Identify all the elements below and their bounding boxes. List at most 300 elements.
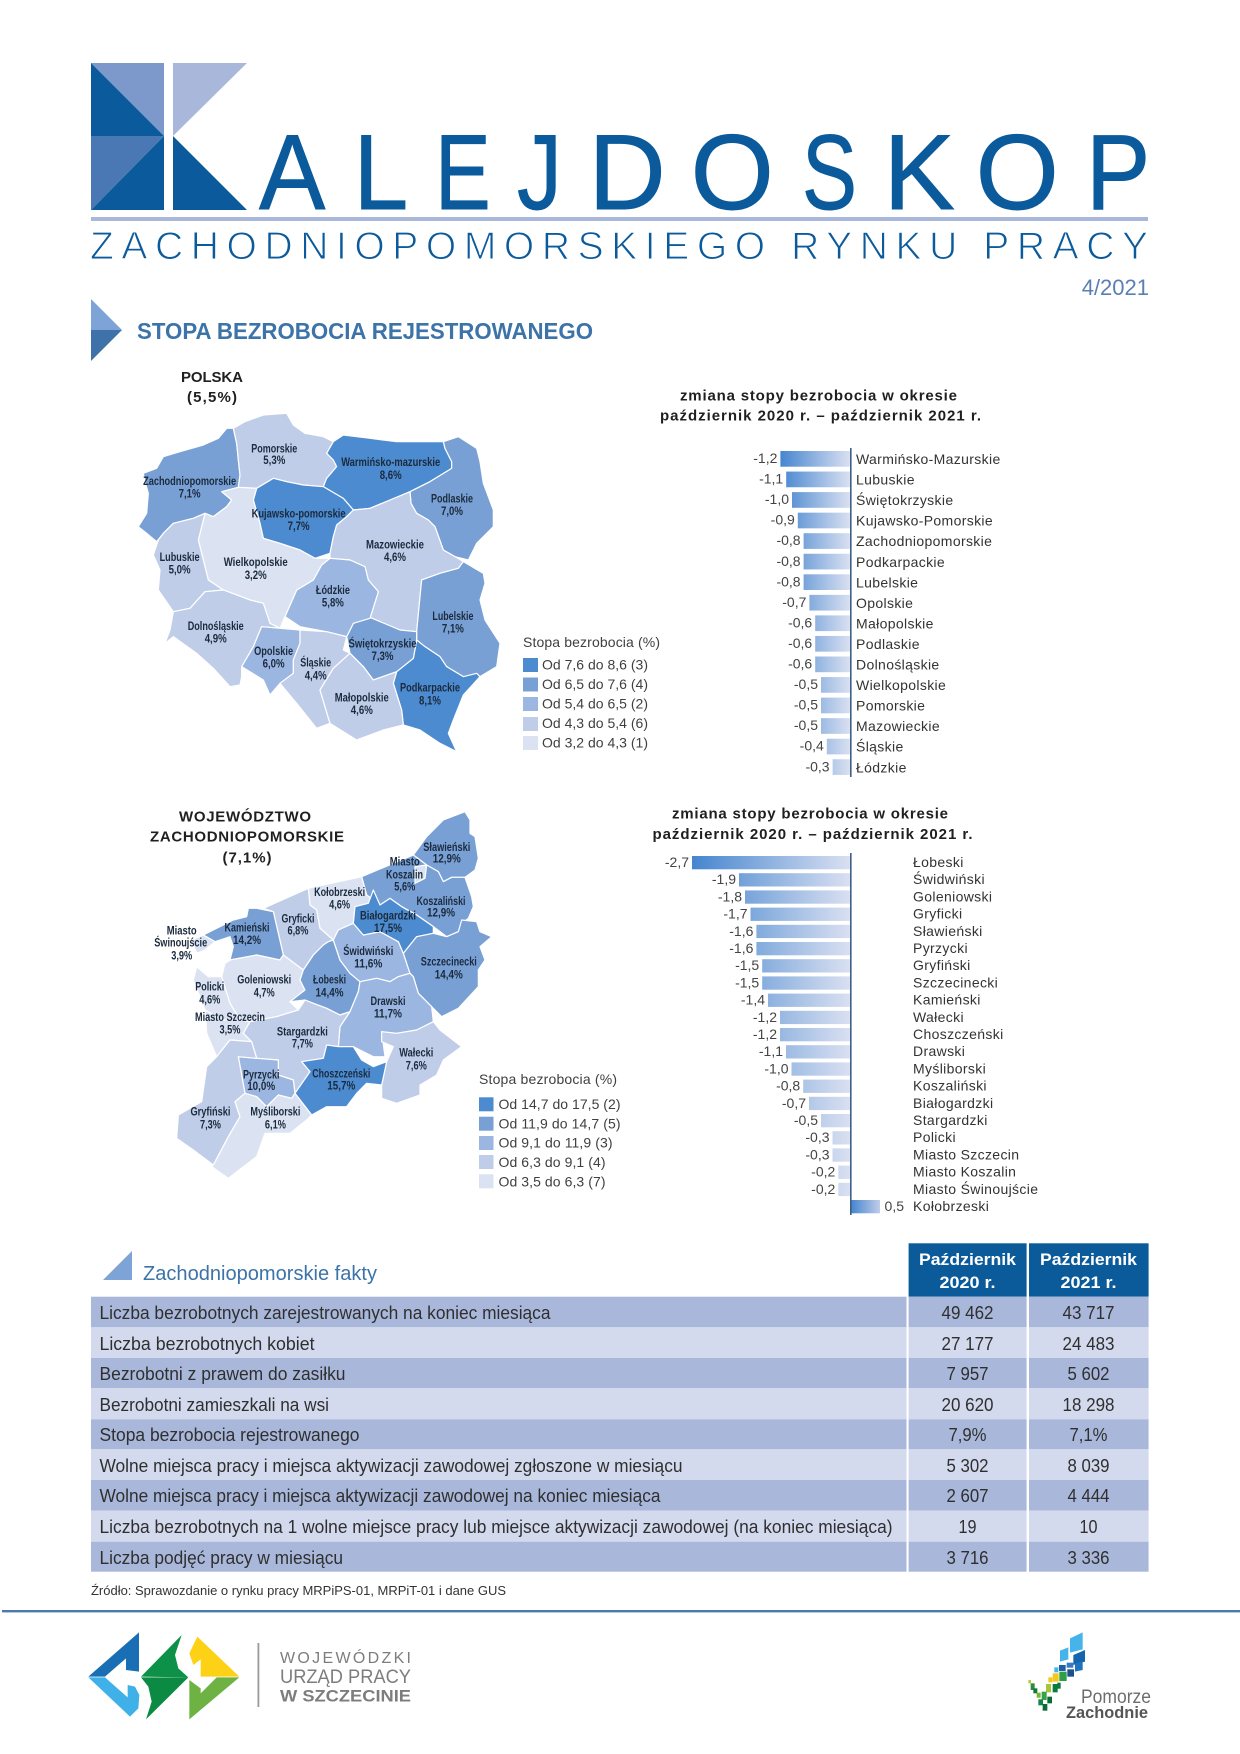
masthead [90, 63, 1150, 300]
legend: counties [479, 1071, 620, 1189]
values: -0,5 [794, 1112, 818, 1128]
chart title: zmiana stopy bezrobocia w okresie [680, 388, 957, 405]
row labels: Liczba bezrobotnych kobiet [100, 1334, 314, 1354]
values: -0,2 [811, 1181, 836, 1197]
bars [780, 451, 850, 775]
table rows backgrounds [91, 1297, 1149, 1572]
column values October 2020: 19 [958, 1517, 976, 1537]
values: -1,5 [735, 957, 759, 973]
region labels: Poland: 5,0% [169, 562, 191, 576]
county: Miasto Szczecin [205, 1010, 252, 1057]
region labels: Poland: 7,1% [442, 622, 464, 636]
column headers: Październik [1040, 1250, 1138, 1269]
county: Miasto Świnoujście [192, 935, 215, 953]
county labels: 7,6% [406, 1058, 427, 1072]
column values October 2021: 43 717 [1062, 1303, 1114, 1323]
county names: Kamieński [913, 992, 981, 1008]
county labels: Miasto [167, 923, 197, 937]
legend: Poland: Od 3,2 do 4,3 (1) [542, 734, 648, 750]
logo text [1066, 1687, 1151, 1722]
county labels: Łobeski [313, 973, 346, 987]
voivodeship names: Małopolskie [856, 615, 934, 631]
region labels: Poland: 8,6% [380, 468, 402, 482]
voivodeship names: Kujawsko-Pomorskie [856, 513, 993, 529]
region: Opolskie [242, 627, 300, 695]
column values October 2020: 3 716 [946, 1548, 988, 1568]
county labels: 6,8% [288, 923, 309, 937]
section heading [91, 299, 593, 361]
column values October 2021 [1062, 1303, 1114, 1568]
county names [913, 854, 1038, 1214]
legend: counties: Od 14,7 do 17,5 (2) [498, 1096, 620, 1112]
voivodeship names: Lubelskie [856, 574, 918, 590]
values: -1,2 [753, 1009, 777, 1025]
region labels: Poland: 7,3% [372, 649, 394, 663]
column values October 2021: 18 298 [1062, 1395, 1114, 1415]
voivodeship names: Podlaskie [856, 636, 920, 652]
values: -2,7 [665, 854, 689, 870]
county labels: 14,4% [435, 967, 463, 981]
county: Policki [193, 967, 240, 1020]
values: -1,1 [759, 471, 783, 487]
row labels: Stopa bezrobocia rejestrowanego [100, 1425, 360, 1445]
row labels: Liczba bezrobotnych zarejestrowanych na koniec miesiąca [100, 1303, 551, 1323]
county labels: 12,9% [427, 906, 455, 920]
issue number: 4/2021 [1082, 275, 1149, 300]
region labels: Poland: Zachodniopomorskie [143, 474, 236, 488]
header rule [91, 217, 1148, 221]
icon: pixel squares [1028, 1632, 1085, 1711]
county: Świdwiński [333, 923, 410, 982]
column values October 2020: 27 177 [942, 1334, 994, 1354]
column values October 2021: 8 039 [1068, 1456, 1110, 1476]
legend: counties: Od 11,9 do 14,7 (5) [498, 1115, 620, 1131]
title: O [691, 112, 774, 232]
organisation name: WOJEWÓDZKI [280, 1648, 411, 1667]
county labels: 3,5% [220, 1022, 241, 1036]
values: -0,3 [805, 1129, 830, 1145]
region labels: Poland: Śląskie [300, 655, 331, 670]
county: Wałecki [382, 1022, 462, 1103]
county: Miasto Koszalin [415, 865, 427, 883]
source note: Źródło: Sprawozdanie o rynku pracy MRPiPS-01, MRPiT-01 i dane GUS [91, 1583, 506, 1598]
region: Lubelskie [417, 562, 500, 677]
panel: Polska map [138, 369, 660, 752]
county names: Pyrzycki [913, 940, 968, 956]
heading text: STOPA BEZROBOCIA REJESTROWANEGO [137, 318, 593, 344]
voivodeship names [856, 451, 1001, 775]
county labels: 4,7% [254, 986, 275, 1000]
values [665, 854, 904, 1214]
county labels: 17,5% [374, 921, 402, 935]
chart title: październik 2020 r. – październik 2021 r. [652, 826, 972, 843]
legend: counties: Od 3,5 do 6,3 (7) [498, 1173, 606, 1189]
county labels: 4,6% [329, 897, 350, 911]
title: E [435, 113, 491, 232]
region labels: Poland: 4,6% [384, 550, 406, 564]
values: -1,6 [729, 923, 754, 939]
county labels: Świdwiński [343, 943, 393, 958]
county labels: 10,0% [247, 1079, 275, 1093]
legend: Poland: Od 7,6 do 8,6 (3) [542, 656, 648, 672]
region labels: Poland: Kujawsko-pomorskie [252, 506, 346, 520]
values: -0,8 [776, 532, 801, 548]
county labels: Kołobrzeski [314, 885, 365, 899]
region labels: Poland: 6,0% [263, 657, 285, 671]
voivodeship names: Świętokrzyskie [856, 491, 953, 508]
county: Choszczeński [295, 1045, 387, 1115]
title: L [354, 112, 408, 232]
map heading: Polska [181, 369, 243, 406]
column headers [909, 1243, 1149, 1297]
region labels: Poland: Warmińsko-mazurskie [341, 455, 440, 469]
column values October 2021: 4 444 [1068, 1486, 1110, 1506]
values: -0,6 [788, 635, 812, 651]
county labels: 12,9% [433, 852, 461, 866]
row labels: Bezrobotni zamieszkali na wsi [100, 1395, 329, 1415]
region labels: Poland: Lubelskie [432, 609, 474, 623]
organisation name: URZĄD PRACY [280, 1667, 411, 1688]
county names: Łobeski [913, 854, 964, 870]
county labels: 11,7% [374, 1007, 402, 1021]
region labels: Poland: 4,6% [351, 703, 373, 717]
region labels: Poland: Łódzkie [316, 583, 350, 597]
county: Myśliborski [212, 1093, 312, 1178]
values: -0,3 [805, 1146, 830, 1162]
county: Szczecinecki [403, 920, 492, 1017]
region labels: Poland: Świętokrzyskie [348, 635, 417, 650]
county names: Policki [913, 1129, 956, 1145]
county names: Sławieński [913, 923, 983, 939]
county names: Gryficki [913, 906, 962, 922]
column headers: 2020 r. [940, 1273, 996, 1292]
organisation name: W SZCZECINIE [280, 1687, 411, 1706]
region labels: Poland: Pomorskie [251, 441, 298, 455]
county labels: Gryfiński [190, 1105, 230, 1119]
county labels: Białogardzki [360, 908, 416, 922]
values: -0,8 [776, 1078, 800, 1094]
map heading: województwo: WOJEWÓDZTWO [179, 808, 311, 826]
county names: Drawski [913, 1043, 965, 1059]
county names: Białogardzki [913, 1095, 993, 1111]
row labels: Bezrobotni z prawem do zasiłku [100, 1364, 346, 1384]
voivodeship names: Śląskie [856, 738, 904, 755]
values: -0,4 [800, 738, 824, 754]
column values October 2020 [942, 1303, 994, 1568]
region: Kujawsko-pomorskie [253, 478, 353, 558]
values: -0,7 [782, 1095, 806, 1111]
table heading: Zachodniopomorskie fakty [143, 1263, 377, 1285]
county labels: Koszaliński [416, 894, 466, 908]
county labels: Goleniowski [237, 973, 291, 987]
region: Śląskie [280, 630, 350, 728]
county names: Miasto Koszalin [913, 1164, 1016, 1180]
region: Podkarpackie [393, 640, 480, 752]
county labels [154, 840, 477, 1131]
title: O [976, 112, 1059, 232]
values: -1,2 [753, 450, 778, 466]
voivodeship names: Podkarpackie [856, 554, 945, 570]
map heading: województwo: (7,1%) [222, 849, 272, 866]
region labels: Poland: Opolskie [254, 644, 293, 658]
county labels: 5,6% [394, 880, 416, 894]
region: Dolnośląskie [165, 590, 280, 687]
county names: Wałecki [913, 1009, 964, 1025]
divider [258, 1643, 259, 1707]
voivodeship names: Dolnośląskie [856, 656, 940, 672]
logo text: Zachodnie [1066, 1703, 1148, 1722]
values: -0,5 [794, 697, 818, 713]
region: Małopolskie [320, 653, 403, 740]
chart title [652, 805, 972, 843]
values: -1,4 [741, 992, 765, 1008]
values: -0,5 [794, 676, 818, 692]
legend: Poland: Stopa bezrobocia (%) [523, 634, 660, 650]
column values October 2020: 2 607 [946, 1486, 988, 1506]
region: Warmińsko-mazurskie [323, 435, 452, 510]
county labels: 11,6% [354, 956, 383, 970]
region labels: Poland: 5,3% [263, 453, 286, 467]
county: Sławieński [413, 812, 478, 882]
title: P [1086, 112, 1150, 232]
panel: bar chart counties [652, 805, 1038, 1215]
title: D [588, 112, 666, 232]
row labels: Wolne miejsca pracy i miejsca aktywizacji zawodowej zgłoszone w miesiącu [100, 1456, 682, 1476]
county labels: Miasto Szczecin [195, 1010, 265, 1024]
column headers: Październik [919, 1250, 1017, 1269]
column values October 2021: 5 602 [1068, 1364, 1110, 1384]
region: Mazowieckie [330, 492, 463, 632]
county: Goleniowski [222, 955, 305, 1022]
values: -0,8 [776, 573, 801, 589]
values: -1,5 [735, 974, 759, 990]
row labels: Liczba podjęć pracy w miesiącu [100, 1548, 343, 1568]
county labels: Policki [195, 980, 224, 994]
county labels: Sławieński [423, 840, 470, 854]
legend: Poland: Od 4,3 do 5,4 (6) [542, 715, 648, 731]
region: Łódzkie [285, 558, 378, 637]
county labels: Choszczeński [312, 1066, 370, 1080]
region: Podlaskie [410, 437, 493, 560]
row labels [100, 1303, 892, 1568]
county names: Świdwiński [913, 870, 985, 887]
values: 0,5 [885, 1198, 904, 1214]
county: Pyrzycki [238, 1057, 295, 1107]
region labels: Poland: Wielkopolskie [224, 555, 288, 569]
voivodeship names: Warmińsko-Mazurskie [856, 451, 1001, 467]
county labels: Kamieński [224, 921, 270, 935]
county names: Goleniowski [913, 888, 992, 904]
region labels: Poland: 8,1% [419, 693, 441, 707]
region labels: Poland: 3,2% [245, 568, 267, 582]
county names: Myśliborski [913, 1060, 986, 1076]
county labels: Stargardzki [277, 1025, 328, 1039]
county: Białogardzki [353, 890, 433, 953]
region labels: Poland: 7,0% [441, 504, 463, 518]
organisation name [280, 1648, 411, 1706]
voivodeship names: Opolskie [856, 595, 913, 611]
region labels: Poland: Dolnośląskie [188, 619, 244, 633]
region labels: Poland: Podlaskie [431, 491, 473, 505]
values: -1,8 [718, 888, 742, 904]
region labels: Poland: Mazowieckie [366, 537, 424, 551]
values: -0,8 [776, 553, 801, 569]
panel: facts table [91, 1243, 1149, 1598]
county labels: Świnoujście [154, 935, 207, 950]
voivodeship names: Łódzkie [856, 759, 907, 775]
voivodeship names: Mazowieckie [856, 718, 940, 734]
values: -1,2 [753, 1026, 777, 1042]
values: -1,0 [764, 1060, 789, 1076]
county: Gryficki [263, 888, 333, 970]
map heading: województwo: ZACHODNIOPOMORSKIE [150, 829, 344, 846]
county labels: Myśliborski [250, 1105, 300, 1119]
column values October 2020: 20 620 [942, 1395, 994, 1415]
column values October 2021: 3 336 [1068, 1548, 1110, 1568]
region labels: Poland: 4,9% [205, 632, 227, 646]
county labels: Szczecinecki [421, 955, 477, 969]
bars [692, 856, 880, 1213]
region labels: Poland [143, 441, 474, 717]
title: S [802, 114, 857, 233]
county labels: Koszalin [386, 867, 423, 881]
region labels: Poland: Małopolskie [335, 691, 389, 705]
county names: Koszaliński [913, 1078, 987, 1094]
county names: Szczecinecki [913, 974, 998, 990]
row labels: Wolne miejsca pracy i miejsca aktywizacji zawodowej na koniec miesiąca [100, 1486, 661, 1506]
legend: counties: Od 6,3 do 9,1 (4) [498, 1154, 606, 1170]
region: Lubuskie [153, 513, 223, 612]
county names: Miasto Świnoujście [913, 1180, 1038, 1197]
icon: section triangle [91, 299, 122, 361]
region labels: Poland: 5,8% [322, 596, 344, 610]
title [259, 112, 1150, 233]
legend: Poland: Od 5,4 do 6,5 (2) [542, 696, 648, 712]
chart title: zmiana stopy bezrobocia w okresie [672, 805, 948, 822]
county labels: Gryficki [282, 912, 314, 926]
county: Gryfiński [177, 1040, 257, 1165]
footer logo: Pomorze Zachodnie [1028, 1632, 1151, 1722]
panel: bar chart voivodeships [660, 388, 1001, 777]
column headers: 2021 r. [1060, 1273, 1116, 1292]
icon: kaleidoscope K logo [91, 63, 247, 210]
values [753, 450, 830, 774]
values: -1,1 [759, 1043, 783, 1059]
county labels: Pyrzycki [243, 1068, 279, 1082]
legend: Poland [523, 634, 660, 750]
voivodeship names: Wielkopolskie [856, 677, 946, 693]
values: -1,0 [765, 491, 789, 507]
region: Pomorskie [233, 413, 337, 488]
voivodeship names: Pomorskie [856, 698, 925, 714]
region: Świętokrzyskie [347, 617, 417, 680]
map heading: województwo [150, 808, 344, 866]
county names: Choszczeński [913, 1026, 1004, 1042]
region labels: Poland: Podkarpackie [400, 681, 460, 695]
voivodeship names: Zachodniopomorskie [856, 533, 992, 549]
axis [850, 448, 852, 777]
region labels: Poland: 7,1% [179, 487, 201, 501]
map heading: Polska: POLSKA [181, 369, 243, 386]
values: -0,2 [811, 1164, 836, 1180]
county: Kamieński [203, 908, 283, 960]
county names: Miasto Szczecin [913, 1146, 1019, 1162]
region labels: Poland: Lubuskie [160, 550, 200, 564]
values: -0,5 [794, 717, 818, 733]
footer rule [2, 1610, 1240, 1612]
row labels: Liczba bezrobotnych na 1 wolne miejsce pracy lub miejsce aktywizacji zawodowej (na koniec miesiąca) [100, 1517, 892, 1537]
county names: Gryfiński [913, 957, 971, 973]
county: Drawski [338, 973, 433, 1057]
region: Zachodniopomorskie [138, 428, 240, 542]
county labels: 3,9% [171, 948, 192, 962]
county labels: 6,1% [265, 1117, 286, 1131]
column values October 2021: 7,1% [1070, 1425, 1108, 1445]
column values October 2020: 49 462 [942, 1303, 994, 1323]
values: -0,9 [771, 512, 795, 528]
values: -0,7 [782, 594, 807, 610]
county: Koszaliński [362, 855, 473, 937]
county: Stargardzki [243, 1000, 350, 1093]
county labels: 14,2% [233, 933, 261, 947]
choropleth map of Poland [138, 413, 500, 752]
column values October 2021: 10 [1080, 1517, 1098, 1537]
legend: Poland: Od 6,5 do 7,6 (4) [542, 676, 648, 692]
region: Wielkopolskie [198, 487, 330, 628]
county labels: 4,6% [199, 992, 221, 1006]
choropleth map of counties [177, 812, 492, 1178]
county names: Stargardzki [913, 1112, 988, 1128]
title: K [884, 112, 955, 232]
icon: table triangle [103, 1251, 132, 1280]
values: -0,3 [805, 758, 830, 774]
values: -0,6 [788, 614, 812, 630]
voivodeship names: Lubuskie [856, 472, 915, 488]
county names: Kołobrzeski [913, 1198, 989, 1214]
chart title: październik 2020 r. – październik 2021 r. [660, 408, 981, 425]
county: Łobeski [290, 940, 360, 1015]
county labels: 7,3% [200, 1117, 221, 1131]
title: A [259, 112, 325, 232]
county labels: 7,7% [292, 1037, 313, 1051]
column values October 2020: 7,9% [948, 1425, 986, 1445]
region labels: Poland: 4,4% [305, 668, 327, 682]
column values October 2020: 7 957 [946, 1364, 988, 1384]
values: -1,9 [712, 871, 736, 887]
county labels: Miasto [390, 854, 420, 868]
column values October 2020: 5 302 [946, 1456, 988, 1476]
logo text: Pomorze [1081, 1687, 1151, 1708]
panel: Zachodniopomorskie map [150, 808, 620, 1189]
values: -1,6 [729, 940, 754, 956]
county labels: Wałecki [399, 1046, 433, 1060]
county: Kołobrzeski [308, 877, 373, 940]
chart title [660, 388, 981, 425]
footer logo: Wojewódzki Urząd Pracy [88, 1632, 411, 1719]
county labels: 14,4% [316, 986, 344, 1000]
icon: WUP emblem [88, 1632, 239, 1719]
values: -1,7 [723, 906, 748, 922]
legend: counties: Od 9,1 do 11,9 (3) [498, 1135, 612, 1151]
column values October 2021: 24 483 [1062, 1334, 1114, 1354]
axis [850, 853, 852, 1215]
subtitle: ZACHODNIOPOMORSKIEGO RYNKU PRACY [90, 225, 1148, 268]
title: J [517, 113, 562, 232]
legend: counties: Stopa bezrobocia (%) [479, 1071, 617, 1087]
map heading: Polska: (5,5%) [187, 389, 237, 406]
county labels: Drawski [370, 994, 406, 1008]
values: -0,6 [788, 656, 812, 672]
